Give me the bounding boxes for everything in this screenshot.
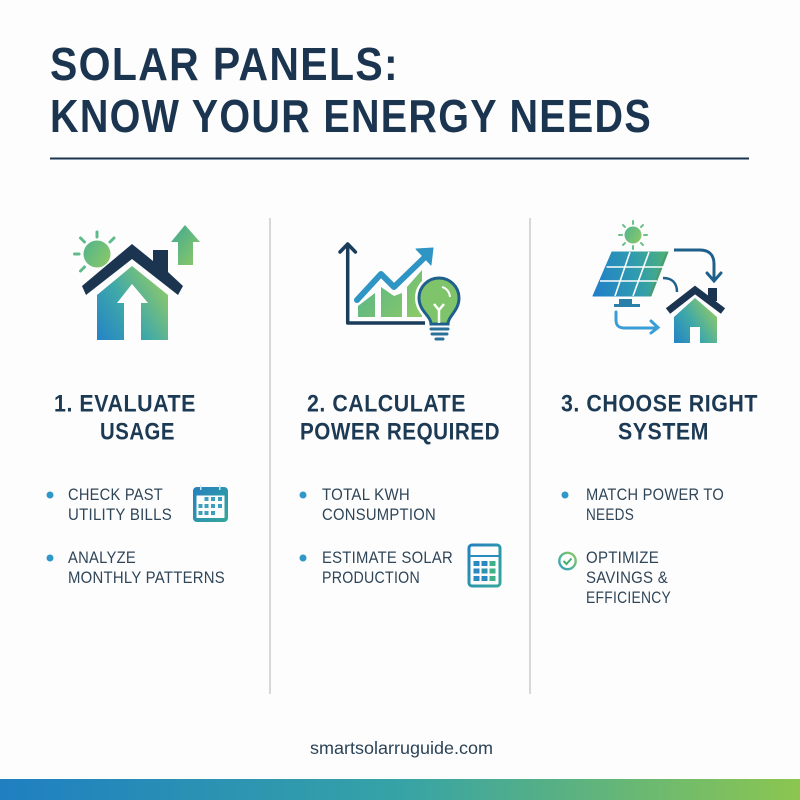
bullet: check past utility bills: UTILITY BILLS (68, 505, 172, 524)
bullet: check past utility bills: CHECK PAST (68, 485, 163, 504)
icon: house with sun and up arrow (74, 225, 200, 340)
bullet: total kwh consumption (300, 485, 436, 524)
heading: choose right system: SYSTEM (618, 418, 709, 446)
bullet: check past utility bills (46, 485, 172, 524)
heading: calculate power required (300, 390, 500, 446)
bullet: optimize savings and efficiency: SAVINGS & (586, 568, 668, 587)
bullet: optimize savings and efficiency (586, 548, 671, 607)
bullet: analyze monthly patterns: ANALYZE (68, 548, 136, 567)
bullet: estimate solar production (300, 548, 453, 587)
bullet: match power to needs (562, 485, 724, 524)
footer gradient bar (0, 779, 800, 800)
title: SOLAR PANELS: (50, 38, 399, 90)
heading: evaluate usage (54, 390, 196, 446)
bullet: analyze monthly patterns: MONTHLY PATTERNS (68, 568, 225, 587)
footer url: smartsolarruguide.com (310, 738, 493, 758)
bullet: total kwh consumption: TOTAL KWH (322, 485, 410, 504)
heading: evaluate usage: 1. EVALUATE (54, 390, 196, 418)
panel: evaluate usage (46, 225, 228, 587)
icon: growth chart with light bulb (340, 244, 459, 339)
bullet: estimate solar production: ESTIMATE SOLAR (322, 548, 453, 567)
bullet: match power to needs: MATCH POWER TO (586, 485, 724, 504)
heading: choose right system: 3. CHOOSE RIGHT (561, 390, 758, 418)
title: KNOW YOUR ENERGY NEEDS (50, 90, 652, 142)
bullet: total kwh consumption: CONSUMPTION (322, 505, 436, 524)
heading: evaluate usage: USAGE (100, 418, 175, 446)
bullet: estimate solar production: PRODUCTION (322, 568, 420, 587)
heading: calculate power required: POWER REQUIRED (300, 418, 500, 446)
icon: solar panel feeding house (593, 221, 723, 343)
icon: calendar (193, 485, 228, 522)
heading: choose right system (561, 390, 758, 446)
icon: calculator (469, 545, 500, 586)
bullet: match power to needs: NEEDS (586, 505, 634, 524)
bullet: analyze monthly patterns (46, 548, 225, 587)
icon: check circle (559, 553, 576, 569)
heading: calculate power required: 2. CALCULATE (307, 390, 466, 418)
title (50, 38, 652, 142)
panel: calculate power required (300, 244, 500, 587)
bullet: optimize savings and efficiency: EFFICIENCY (586, 588, 671, 607)
panel: choose right system (559, 221, 758, 607)
bullet: optimize savings and efficiency: OPTIMIZE (586, 548, 659, 567)
